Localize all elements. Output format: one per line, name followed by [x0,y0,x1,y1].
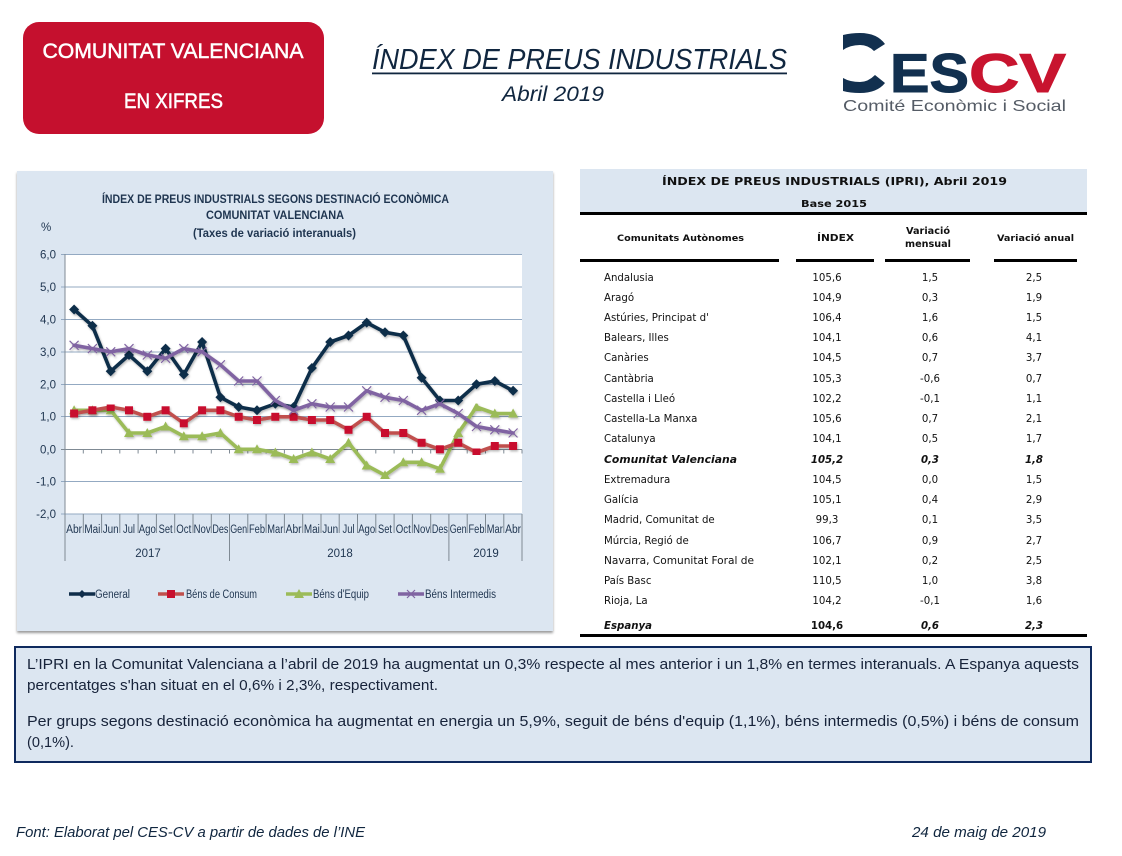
table header: Variació anual [997,233,1074,244]
table rows: 1,5 [1026,313,1042,324]
table rows: 4,1 [1026,333,1042,344]
text box: summary: (0,1%). [27,735,74,751]
table header: ÍNDEX [817,232,855,244]
table rows: 104,1 [812,333,842,344]
y axis labels [36,250,56,521]
logo: CES CV [843,33,1066,115]
table rows: 0,7 [922,353,938,364]
table rows: 2,9 [1026,495,1042,506]
x axis months: Feb [249,524,265,536]
table rows: Catalunya [604,434,656,445]
table rows [604,273,1043,632]
table rows: Navarra, Comunitat Foral de [604,556,754,567]
table rows: País Basc [604,575,651,587]
table rows: -0,6 [920,374,940,385]
table rows: Andalusia [604,273,654,284]
table rows: 1,7 [1026,434,1042,445]
x axis months: Jun [103,524,119,536]
y axis labels: 1,0 [40,412,56,424]
table rows: 104,1 [812,434,842,445]
badge: Comunitat Valenciana en xifres [23,22,324,134]
table header: Variació [906,226,950,237]
x axis months: Nov [413,524,430,536]
table rows: 2,5 [1026,273,1042,284]
table rows: 106,7 [812,536,842,547]
x axis years: 2019 [473,548,499,560]
chart title: COMUNITAT VALENCIANA [206,210,344,222]
y axis labels: 5,0 [40,282,56,294]
table rows: 0,2 [922,556,938,567]
x axis months: Mai [84,524,100,536]
x axis months: Mai [304,524,320,536]
table rows: 104,6 [811,621,843,632]
table rows: 1,6 [1026,596,1042,607]
logo: CES CV: Comité Econòmic i Social [843,98,1066,115]
y axis labels: -2,0 [36,509,56,521]
table rows: 1,5 [922,273,938,284]
table rows: 104,2 [812,596,842,607]
table rows: 0,9 [922,536,938,547]
x axis months: Jun [322,524,338,536]
title: ÍNDEX DE PREUS INDUSTRIALS [372,43,788,76]
x axis months: Abr [505,524,521,536]
table rows: Castella i Lleó [604,393,675,405]
table rows: 104,9 [812,293,842,304]
y axis labels: 3,0 [40,347,56,359]
table rows: 102,1 [812,556,842,567]
x axis months: Feb [468,524,484,536]
x axis months: Oct [396,524,411,536]
table rows: 1,6 [922,313,938,324]
table rows: 2,1 [1026,414,1042,425]
table rows: 105,3 [812,374,842,385]
y axis labels: -1,0 [36,476,56,488]
table rows: Castella-La Manxa [604,414,697,425]
x axis months: Mar [487,524,503,536]
table rows: 0,0 [922,475,938,486]
table rows: 3,7 [1026,353,1042,364]
table rows: 105,6 [812,414,842,425]
table title: ÍNDEX DE PREUS INDUSTRIALS (IPRI), Abril 2019 [662,175,1007,188]
legend: Béns Intermedis [425,589,496,601]
table rows: 105,2 [811,455,843,466]
legend [69,589,496,601]
table rows: 1,1 [1026,394,1042,405]
axis unit: % [41,222,51,234]
table rows: 106,4 [812,313,842,324]
table rows: 1,8 [1025,455,1043,466]
chart title: ÍNDEX DE PREUS INDUSTRIALS SEGONS DESTINACIÓ ECONÒMICA [102,193,449,206]
table header: mensual [905,239,951,250]
table rows: Espanya [604,621,652,632]
table rows: Canàries [604,352,649,364]
table rows: 1,0 [922,576,938,587]
table rows: 0,4 [922,495,938,506]
chart title [102,193,449,240]
x axis months: Jul [342,524,354,536]
x axis months: Des [432,524,448,536]
table rows: Comunitat Valenciana [604,455,737,466]
y axis labels: 4,0 [40,314,56,326]
table rows: 105,1 [812,495,842,506]
table header [580,226,1077,260]
legend: Béns d'Equip [313,589,369,601]
table rows: -0,1 [920,596,940,607]
date: 24 de maig de 2019 [911,824,1047,841]
x axis months: Oct [176,524,192,536]
logo: CES CV: ES [890,42,969,104]
badge: Comunitat Valenciana en xifres: COMUNITAT VALENCIANA [42,40,304,63]
table rows: 105,6 [812,273,842,284]
text box: summary [15,647,1091,762]
source note: Font: Elaborat pel CES-CV a partir de dades de l’INE [16,824,366,841]
table rows: 0,7 [1026,374,1042,385]
table rows: 2,3 [1025,621,1043,632]
table rows: 1,9 [1026,293,1042,304]
table rows: Cantàbria [604,373,654,385]
table rows: 99,3 [816,515,838,526]
table subtitle: Base 2015 [801,199,867,210]
table rows: Astúries, Principat d' [604,312,709,324]
table rows: 0,7 [922,414,938,425]
table rows: 0,5 [922,434,938,445]
series: Béns de Consum [74,407,513,452]
legend: General [95,589,130,601]
y axis labels: 2,0 [40,380,56,392]
chart title: (Taxes de variació interanuals) [193,228,356,240]
panel: line chart [17,171,553,631]
table rows: Extremadura [604,475,670,486]
x axis months: Gen [450,524,467,536]
table rows: 0,3 [922,293,938,304]
text box: summary: Per grups segons destinació econòmica ha augmentat en energia un 5,9%, seguit de béns d'equip (1,1%), béns intermedis (0,5%) i béns de consum [27,714,1079,730]
table rows: 2,7 [1026,536,1042,547]
table rows: 1,5 [1026,475,1042,486]
y axis labels: 0,0 [40,444,56,456]
table rows: 0,3 [921,455,939,466]
table rows: 110,5 [812,576,842,587]
table rows: Múrcia, Regió de [604,535,689,547]
table rows: 102,2 [812,394,842,405]
table rows: Balears, Illes [604,333,669,344]
x axis months: Des [212,524,229,536]
x axis months: Set [159,524,173,536]
x axis months: Set [378,524,393,536]
subtitle: Abril 2019 [500,83,604,106]
table rows: -0,1 [920,394,940,405]
series: General [74,310,513,410]
series: Béns d'Equip [74,407,513,475]
table rows: Galícia [604,494,638,506]
table rows: 3,5 [1026,515,1042,526]
table rows: 0,1 [922,515,938,526]
x axis months: Ago [358,524,375,536]
x axis months [66,524,521,536]
x axis years: 2018 [327,548,353,560]
table rows: 0,6 [922,333,938,344]
table rows: 104,5 [812,353,842,364]
table rows: Rioja, La [604,596,648,607]
x axis months: Jul [123,524,135,536]
panel: data table [580,169,1087,637]
x axis years: 2017 [135,548,161,560]
table rows: 0,6 [921,621,939,632]
badge: Comunitat Valenciana en xifres: EN XIFRES [124,90,223,113]
x axis months: Ago [139,524,156,536]
logo: CES CV: CV [969,42,1066,104]
table rows: Madrid, Comunitat de [604,515,715,526]
table rows: Aragó [604,292,634,304]
x axis months: Mar [267,524,283,536]
text box: summary: L’IPRI en la Comunitat Valenciana a l’abril de 2019 ha augmentat un 0,3% respecte al mes anterior i un 1,8% en termes interanuals. A Espanya aquests [27,657,1079,673]
x axis months: Abr [66,524,82,536]
y axis labels: 6,0 [40,250,56,262]
x axis years [135,548,499,560]
table rows: 2,5 [1026,556,1042,567]
x axis months: Gen [230,524,247,536]
x axis months: Nov [194,524,211,536]
series: Béns Intermedis [74,345,513,433]
x axis months: Abr [286,524,302,536]
table rows: 104,5 [812,475,842,486]
text box: summary: percentatges s'han situat en el 0,6% i 2,3%, respectivament. [27,678,438,694]
table header: Comunitats Autònomes [617,233,744,244]
table rows: 3,8 [1026,576,1042,587]
legend: Béns de Consum [186,589,257,601]
